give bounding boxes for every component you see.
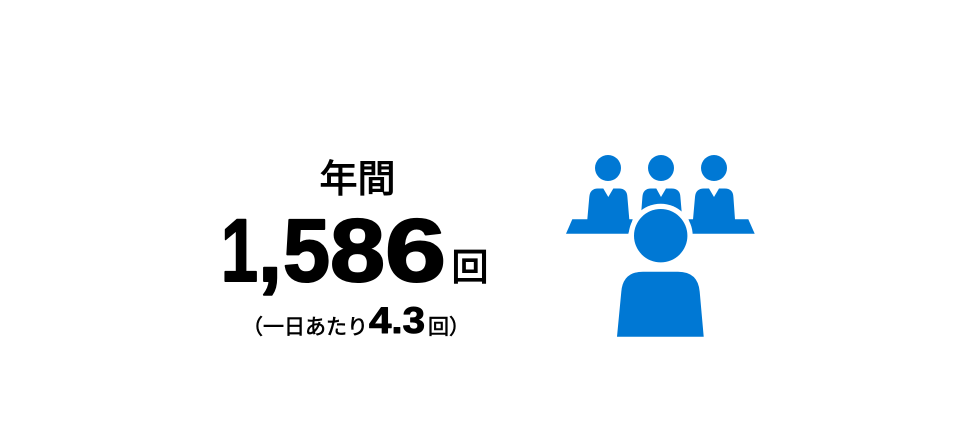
big number: annual count: 6 bbox=[385, 200, 446, 300]
big number: annual count bbox=[221, 200, 446, 300]
person: back centre bbox=[641, 155, 682, 220]
sub text: per day: （一日あたり bbox=[242, 316, 368, 339]
person: front bbox=[617, 209, 704, 337]
unit: times: 回 bbox=[452, 247, 488, 288]
icon: meeting of people bbox=[566, 155, 755, 337]
big number: annual count: 8 bbox=[330, 200, 385, 300]
desk: right bbox=[688, 219, 755, 234]
big number: annual count: 1 bbox=[221, 200, 258, 300]
sub text: per day bbox=[242, 300, 470, 341]
white ring around front head bbox=[629, 204, 693, 268]
sub text: per day: 4.3 bbox=[369, 300, 425, 341]
heading: per year: 年間 bbox=[320, 159, 396, 201]
big number: annual count: 5 bbox=[283, 200, 330, 300]
person: back left bbox=[587, 155, 629, 220]
person: back right bbox=[693, 155, 735, 220]
big number: annual count: , bbox=[258, 200, 282, 300]
sub text: per day: 回） bbox=[428, 316, 470, 339]
desk: left bbox=[566, 219, 633, 234]
